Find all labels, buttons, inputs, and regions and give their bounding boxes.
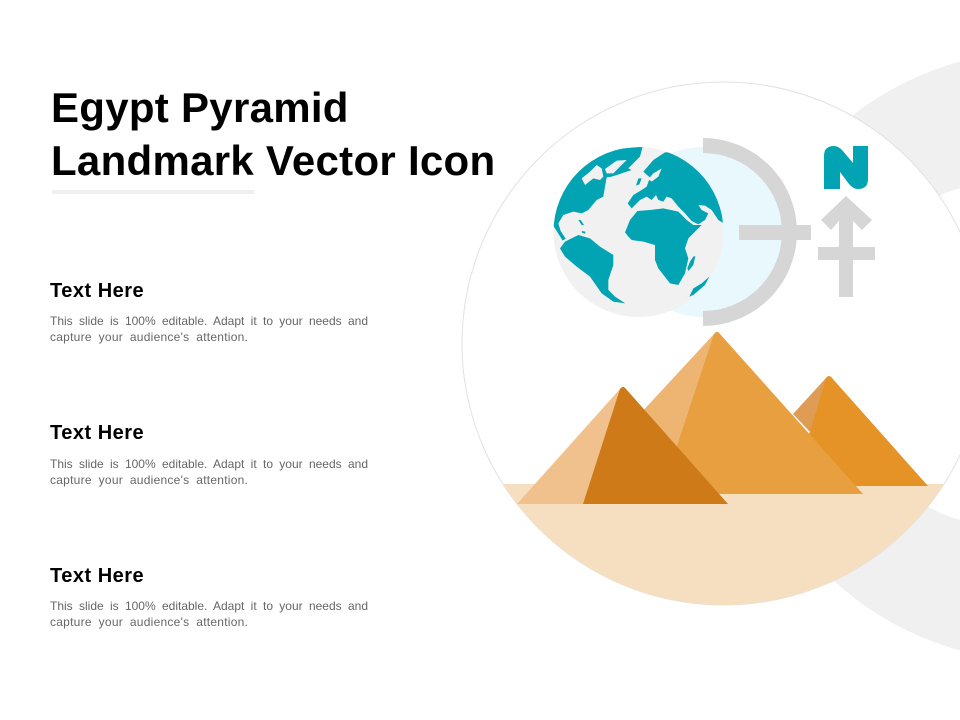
caribbean — [578, 220, 584, 225]
north america and greenland — [550, 147, 643, 241]
text block 2: capture your audience's attention. — [50, 473, 248, 487]
compass letter N — [824, 146, 868, 189]
north arrow — [821, 196, 872, 297]
south america — [560, 235, 625, 303]
sand ground — [503, 484, 944, 605]
text block 3: capture your audience's attention. — [50, 615, 248, 629]
madagascar — [687, 256, 695, 271]
background ring shape — [735, 51, 960, 661]
title: Egypt Pyramid — [51, 84, 349, 131]
text block 2: Text Here — [50, 422, 144, 444]
text block 2 — [50, 422, 368, 487]
pyramid: small front — [517, 387, 728, 504]
text block 1 — [50, 280, 368, 344]
australia sliver — [689, 277, 709, 297]
light blue disc — [618, 147, 788, 317]
title underline — [52, 190, 254, 194]
pyramid: right — [780, 376, 928, 486]
eurasia — [628, 152, 727, 225]
text block 1: capture your audience's attention. — [50, 330, 248, 344]
pyramid: large centre — [566, 332, 863, 494]
main circle — [462, 82, 960, 605]
title — [51, 84, 495, 184]
africa — [625, 208, 702, 285]
compass half ring — [703, 146, 789, 318]
hudson bay — [582, 165, 603, 185]
text block 3 — [50, 565, 368, 629]
text block 3: Text Here — [50, 565, 144, 587]
baffin sea — [605, 160, 627, 173]
text block 3: This slide is 100% editable. Adapt it to your needs and — [50, 599, 368, 613]
compass horizontal bar — [739, 225, 811, 240]
text block 2: This slide is 100% editable. Adapt it to your needs and — [50, 457, 368, 471]
title: Landmark Vector Icon — [51, 137, 495, 184]
globe — [550, 147, 727, 317]
illustration: globe, compass and pyramids — [462, 62, 960, 650]
text block 1: Text Here — [50, 280, 144, 302]
text block 1: This slide is 100% editable. Adapt it to your needs and — [50, 314, 368, 328]
arrow cross bar — [818, 247, 875, 260]
baltic sea — [648, 168, 662, 182]
british isles — [636, 178, 642, 186]
